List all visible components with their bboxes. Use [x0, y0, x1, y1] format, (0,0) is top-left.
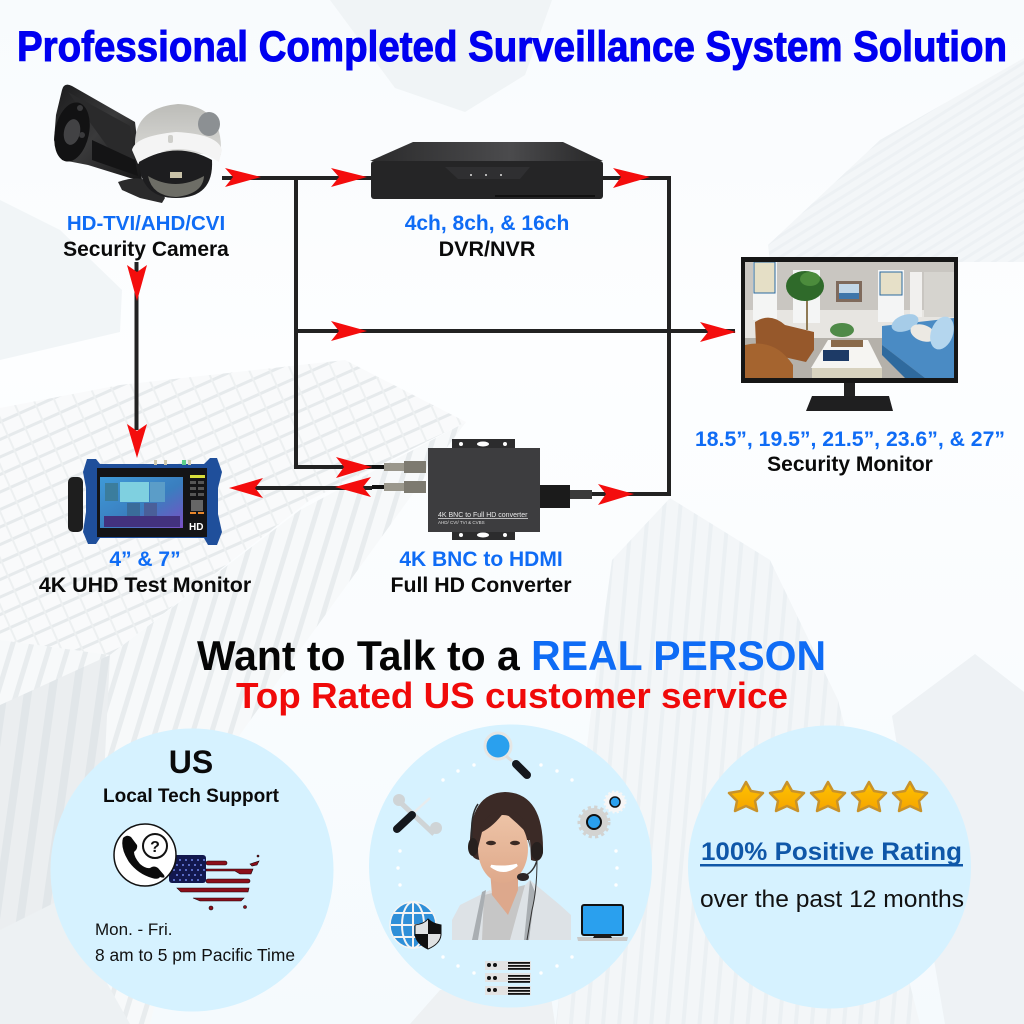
label: DVR: 4ch, 8ch, & 16ch: [405, 212, 569, 235]
heading: local tech support: Local Tech Support: [103, 786, 280, 807]
icon: magnifier: [485, 733, 527, 775]
icon: security cameras: [49, 85, 222, 203]
text: over the past 12 months: over the past 12 months: [700, 886, 964, 913]
label: monitor: 18.5”, 19.5”, 21.5”, 23.6”, & 27”: [695, 428, 1005, 451]
icon: test monitor: [68, 458, 222, 545]
icon: BNC to HDMI converter: 4K BNC to Full HD converter: [438, 512, 528, 519]
icon: laptop: [577, 905, 628, 941]
text: hours: Mon. - Fri.: [95, 920, 172, 939]
label: converter: [390, 548, 572, 597]
label: monitor: [695, 428, 1005, 476]
panel: local tech support: [50, 728, 334, 1012]
icon: BNC to HDMI converter: [372, 439, 592, 540]
label: test monitor: [39, 548, 251, 597]
icon: DVR/NVR: [370, 142, 603, 199]
label: camera: HD-TVI/AHD/CVI: [67, 212, 225, 235]
label: converter: 4K BNC to HDMI: [399, 548, 563, 571]
label: DVR: DVR/NVR: [439, 237, 536, 261]
label: converter: Full HD Converter: [390, 573, 572, 597]
heading: real person: Want to Talk to a REAL PERSON: [197, 632, 826, 679]
icon: US flag map: [169, 855, 259, 910]
icon: test monitor: HD: [189, 522, 203, 533]
heading: US: US: [169, 744, 213, 780]
label: camera: [63, 212, 229, 261]
icon: BNC to HDMI converter: AHD/ CVI/ TVI & CVBS: [438, 520, 485, 525]
icon: five stars: [729, 782, 927, 811]
text: hours: [95, 920, 295, 965]
icon: phone question: ?: [150, 839, 160, 856]
text: positive rating: 100% Positive Rating: [701, 838, 962, 866]
panel: customer service agent: [369, 724, 652, 1008]
label: test monitor: 4K UHD Test Monitor: [39, 573, 251, 597]
arrows: [127, 168, 736, 505]
icon: security monitor: [741, 257, 958, 411]
icon: phone question: [114, 824, 176, 886]
icon: gears: [580, 792, 625, 836]
panel: positive rating: [688, 726, 971, 1008]
ring dots: [396, 763, 619, 975]
text: hours: 8 am to 5 pm Pacific Time: [95, 945, 295, 965]
subheading: customer service: Top Rated US customer service: [236, 675, 788, 716]
connection lines: [136, 178, 735, 494]
label: DVR: [405, 212, 569, 261]
photo: support agent: [452, 792, 571, 940]
label: test monitor: 4” & 7”: [109, 548, 181, 571]
icon: tools: [393, 794, 442, 834]
label: camera: Security Camera: [63, 238, 229, 261]
label: monitor: Security Monitor: [767, 453, 933, 476]
icon: globe and shield: [390, 902, 441, 949]
icon: server list: [485, 961, 531, 995]
